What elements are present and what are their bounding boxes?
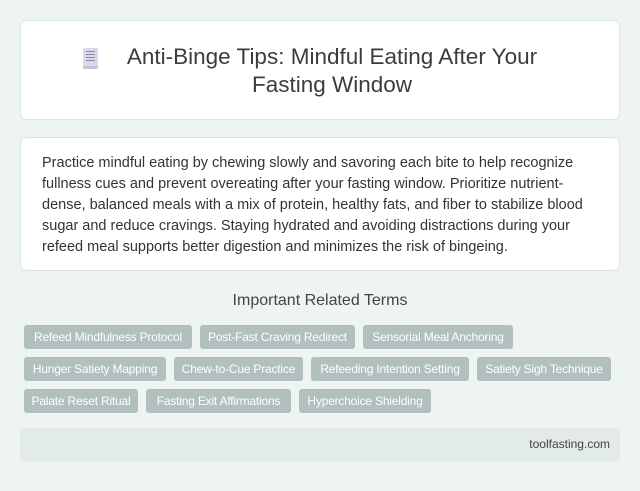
tags: Post-Fast Craving Redirect <box>208 330 347 344</box>
footer <box>20 428 620 461</box>
description text: Practice mindful eating by chewing slowly and savoring each bite to help recognize fullness cues and prevent overeating after your fasting window. Prioritize nutrient-dense, balanced meals with a mix of protein, healthy fats, and fiber to stabilize blood sugar and reduce cravings. Staying hydrated and avoiding distractions during your refeed meal supports better digestion and minimizes the risk of bingeing. <box>42 155 583 255</box>
tags: Sensorial Meal Anchoring <box>372 330 504 344</box>
title card <box>20 20 620 120</box>
footer source: toolfasting.com <box>529 437 610 451</box>
tags: Hyperchoice Shielding <box>307 394 423 408</box>
tags: Fasting Exit Affirmations <box>157 394 280 408</box>
related terms heading: Important Related Terms <box>233 292 407 309</box>
tags: Palate Reset Ritual <box>32 394 130 408</box>
description card <box>20 137 620 271</box>
tags: Chew-to-Cue Practice <box>182 362 295 376</box>
tags: Refeed Mindfulness Protocol <box>34 330 182 344</box>
tags: Refeeding Intention Setting <box>320 362 460 376</box>
tags: Satiety Sigh Technique <box>485 362 603 376</box>
title: Anti-Binge Tips: Mindful Eating After Your Fasting Window <box>127 44 537 97</box>
tags: Hunger Satiety Mapping <box>33 362 157 376</box>
icon: document <box>83 48 98 69</box>
